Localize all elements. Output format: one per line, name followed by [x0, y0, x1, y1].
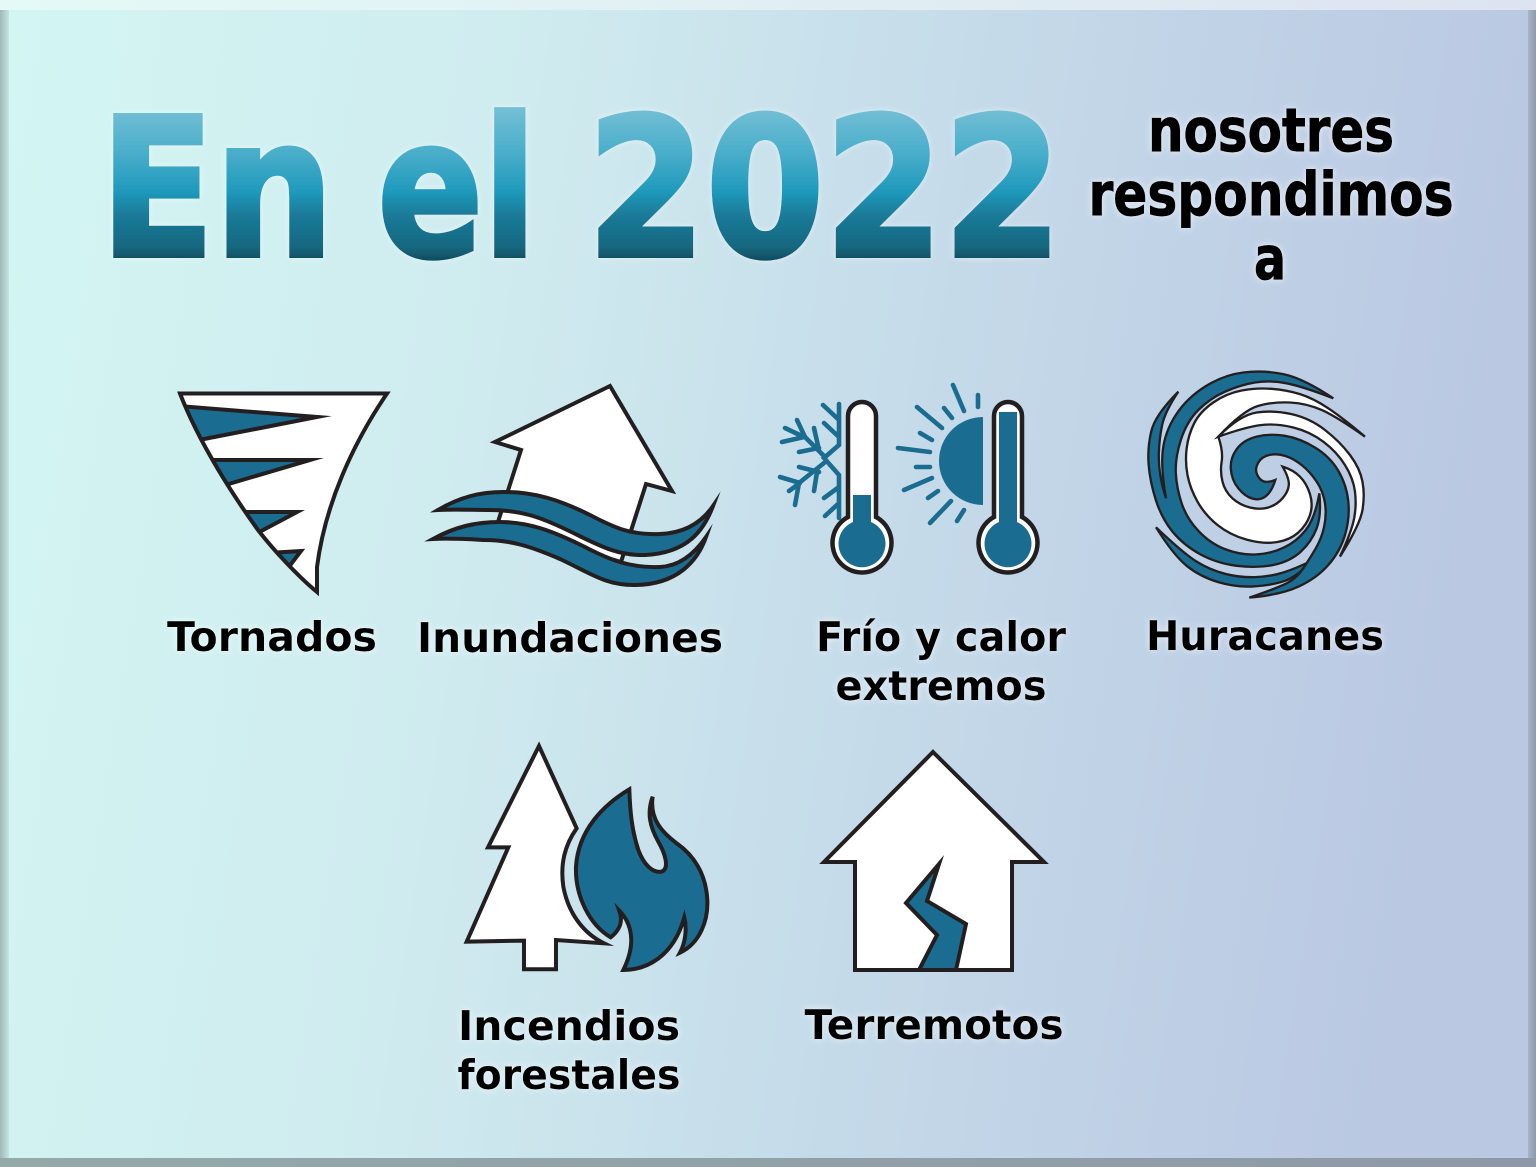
icon: hot thermometer	[979, 402, 1038, 572]
label: Inundaciones: Inundaciones	[417, 614, 723, 662]
icon: earthquake house	[824, 752, 1044, 970]
icon: wildfire	[467, 746, 707, 970]
bottom teal arc	[1156, 527, 1315, 587]
icon: extreme cold and heat	[780, 385, 1038, 572]
icon: sun	[898, 385, 983, 523]
white outer band	[1218, 412, 1364, 557]
label: Huracanes: Huracanes	[1146, 612, 1384, 660]
outer teal arm	[1148, 372, 1333, 567]
label: Incendios forestales	[458, 1002, 680, 1099]
title: el	[378, 78, 536, 302]
inner teal spiral	[1231, 435, 1349, 598]
icon: flooded house	[433, 386, 713, 585]
label: Frío y calor extremos	[816, 613, 1067, 710]
icon: hurricane	[1148, 372, 1365, 598]
icon: tree	[467, 746, 604, 969]
icon: tornado	[178, 394, 387, 592]
label: Incendios forestales: Incendios	[458, 1002, 680, 1050]
label: Frío y calor extremos: Frío y calor	[816, 613, 1067, 661]
icon: snowflake	[780, 404, 839, 518]
label: Incendios forestales: forestales	[458, 1051, 680, 1099]
label: Terremotos: Terremotos	[804, 1001, 1064, 1049]
white main spiral	[1186, 388, 1365, 543]
subtitle	[1088, 96, 1454, 294]
subtitle: a	[1254, 224, 1286, 294]
subtitle: nosotres	[1148, 96, 1394, 166]
title	[100, 78, 1062, 302]
icon: flame	[576, 789, 707, 970]
title: 2022	[587, 78, 1062, 302]
subtitle: respondimos	[1088, 160, 1454, 230]
label: Tornados: Tornados	[167, 613, 377, 661]
icon: cold thermometer	[832, 402, 892, 572]
title: En	[100, 78, 334, 302]
label: Frío y calor extremos: extremos	[836, 662, 1046, 710]
